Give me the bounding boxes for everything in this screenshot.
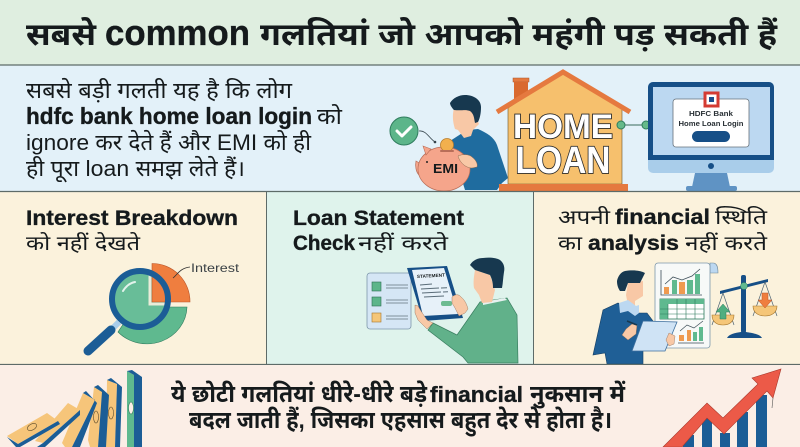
- heading: [558, 205, 768, 255]
- closing text: ये छोटी गलतियां धीरे-धीरे बड़े: [171, 380, 427, 408]
- report document: [655, 263, 718, 348]
- panel: intro: [0, 65, 800, 191]
- heading: स्थिति: [715, 205, 768, 229]
- closing text: नुकसान में: [530, 380, 626, 409]
- heading: अपनी: [558, 205, 611, 229]
- icon: monitor with login screen: [648, 82, 774, 191]
- heading: नहीं करते: [358, 231, 449, 255]
- heading: का: [558, 233, 583, 255]
- intro text: hdfc bank home loan login: [26, 103, 312, 129]
- person with piggy bank: [416, 95, 508, 191]
- closing text: [171, 380, 626, 437]
- heading: Interest Breakdown: [26, 206, 238, 230]
- icon: house with home loan: HOME: [513, 108, 613, 146]
- heading: Loan Statement: [293, 206, 464, 230]
- label: interest: Interest: [191, 261, 240, 275]
- icon: piggy bank: EMI: [433, 161, 458, 176]
- icon: rising arrow and bars: [663, 369, 781, 447]
- closing text: financial: [430, 382, 523, 407]
- title: common: [105, 12, 250, 53]
- pie chart with magnifier: [88, 261, 240, 351]
- icon: falling dominoes: [7, 370, 142, 447]
- title: [26, 12, 779, 53]
- icon: house with home loan: LOAN: [516, 140, 610, 182]
- person with tablet: [407, 258, 518, 363]
- panel: loan statement: [267, 192, 533, 364]
- title: सबसे: [26, 17, 97, 52]
- heading: [293, 206, 464, 255]
- heading: Check: [293, 231, 355, 255]
- title: गलतियां जो आपको महंगी पड़ सकती हैं: [260, 17, 779, 52]
- panel: financial analysis: [534, 192, 800, 364]
- icon: bank logo: [705, 93, 718, 106]
- closing text: बदल जाती हैं, जिसका एहसास बहुत देर से होता है।: [189, 406, 612, 437]
- heading: analysis: [588, 231, 679, 255]
- connector: [617, 121, 650, 129]
- icon: house with home loan: [497, 72, 630, 191]
- checklist card: [367, 273, 411, 329]
- bar chart: [661, 269, 702, 295]
- dividers: [0, 65, 800, 364]
- intro text: ignore कर देते हैं और EMI को ही: [26, 129, 311, 155]
- label: interest: [173, 261, 240, 278]
- icon: balance scale: [712, 275, 777, 338]
- person with clipboard: [593, 270, 677, 364]
- panel: closing message: [0, 365, 800, 447]
- table: [660, 299, 704, 319]
- icon: check badge: [390, 117, 436, 145]
- icon: monitor with login screen: Home Loan Login: [678, 119, 744, 128]
- small chart: [678, 321, 704, 343]
- intro text: ही पूरा loan समझ लेते हैं।: [26, 155, 245, 183]
- icon: monitor with login screen: HDFC Bank: [689, 109, 734, 118]
- intro text: [26, 77, 342, 183]
- intro text: सबसे बड़ी गलती यह है कि लोग: [26, 77, 293, 103]
- icon: up arrow: [716, 304, 730, 319]
- panel: interest breakdown: [0, 192, 266, 364]
- heading: financial: [615, 205, 710, 229]
- panel: title band: [0, 0, 800, 65]
- intro text: को: [317, 104, 342, 129]
- heading: को नहीं देखते: [26, 231, 141, 255]
- heading: [26, 206, 238, 255]
- icon: statement tablet: STATEMENT: [417, 273, 445, 279]
- icon: down arrow: [758, 293, 772, 308]
- heading: नहीं करते: [685, 231, 768, 255]
